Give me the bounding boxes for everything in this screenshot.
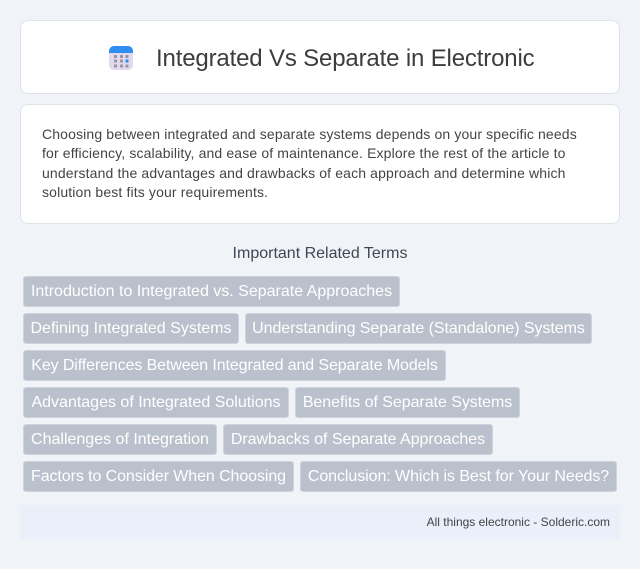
tag: Defining Integrated Systems: [30, 320, 232, 337]
tag: Understanding Separate (Standalone) Systems: [252, 320, 585, 337]
tag: [23, 424, 217, 455]
tag: Challenges of Integration: [31, 431, 209, 448]
footer: All things electronic - Solderic.com: [427, 515, 610, 529]
tag: [23, 313, 239, 344]
tag: [300, 461, 617, 492]
tag: [223, 424, 493, 455]
tag: Key Differences Between Integrated and Separate Models: [31, 357, 438, 374]
intro paragraph: Choosing between integrated and separate systems depends on your specific needs: [42, 126, 577, 142]
tag: [245, 313, 592, 344]
intro paragraph: understand the advantages and drawbacks of each approach and determine which: [42, 165, 566, 181]
tag: Benefits of Separate Systems: [303, 394, 512, 411]
tag: Conclusion: Which is Best for Your Needs?: [308, 468, 609, 485]
footer: [20, 505, 620, 539]
tag: Advantages of Integrated Solutions: [31, 394, 281, 411]
intro paragraph: [42, 126, 577, 200]
tag: Introduction to Integrated vs. Separate Approaches: [31, 283, 392, 300]
tag: Drawbacks of Separate Approaches: [231, 431, 485, 448]
icon: calendar: [109, 46, 133, 70]
related terms tags: [23, 276, 617, 492]
title: Integrated Vs Separate in Electronic: [156, 45, 534, 72]
tag: [295, 387, 520, 418]
intro text card: [20, 104, 620, 224]
tag: Factors to Consider When Choosing: [31, 468, 286, 485]
header card: [20, 20, 620, 94]
tag: [23, 461, 294, 492]
intro paragraph: solution best fits your requirements.: [42, 184, 268, 200]
tag: [23, 387, 289, 418]
related terms heading: Important Related Terms: [233, 245, 407, 262]
intro paragraph: for efficiency, scalability, and ease of maintenance. Explore the rest of the article to: [42, 145, 566, 161]
tag: [23, 276, 400, 307]
tag: [23, 350, 446, 381]
